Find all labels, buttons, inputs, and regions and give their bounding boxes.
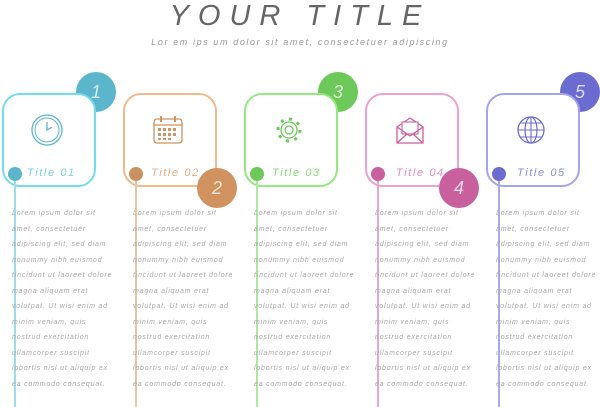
panel: column 3	[244, 72, 358, 407]
text: column 3: ullamcorper suscipit	[254, 350, 332, 356]
number circle 1: 1	[91, 82, 101, 102]
text: column 3: amet, consectetuer	[254, 226, 328, 232]
text: column 4: Lorem ipsum dolor sit	[375, 210, 459, 217]
text: column 3: ea commodo consequat.	[254, 380, 347, 388]
text: column 1: ullamcorper suscipit	[12, 350, 90, 356]
text: column 1	[12, 210, 112, 388]
text: column 2: ea commodo consequat.	[133, 380, 226, 388]
text: column 3	[254, 210, 354, 388]
box 2	[123, 93, 217, 187]
text: column 1: volutpat. Ut wisi enim ad	[12, 303, 108, 310]
text: column 1: adipiscing elit, sed diam	[12, 241, 106, 248]
box 5	[486, 93, 580, 187]
text: column 4	[375, 210, 475, 388]
text: column 1: magna aliquam erat	[12, 288, 88, 294]
text: column 4: adipiscing elit, sed diam	[375, 241, 469, 248]
text: column 5: nonummy nibh euismod	[496, 256, 586, 264]
text: column 5: adipiscing elit, sed diam	[496, 241, 590, 248]
number circle 1	[76, 72, 116, 112]
text: column 4: tincidunt ut laoreet dolore	[375, 272, 475, 279]
text: column 1: tincidunt ut laoreet dolore	[12, 272, 112, 279]
text: column 2: lobortis nisl ut aliquip ex	[133, 365, 229, 372]
text: column 3: magna aliquam erat	[254, 288, 330, 294]
text: column 5: magna aliquam erat	[496, 288, 572, 294]
text: column 2: amet, consectetuer	[133, 226, 207, 232]
text: column 1: minim veniam, quis	[12, 318, 86, 326]
text: column 2: Lorem ipsum dolor sit	[133, 210, 217, 217]
text: column 5: lobortis nisl ut aliquip ex	[496, 365, 592, 372]
text: column 2: tincidunt ut laoreet dolore	[133, 272, 233, 279]
text: column 3: Lorem ipsum dolor sit	[254, 210, 338, 217]
text: column 2	[133, 210, 233, 388]
text: column 4: nostrud exercitation	[375, 334, 452, 341]
title 04: Title 04	[396, 167, 445, 179]
text: column 1: nostrud exercitation	[12, 334, 89, 341]
text: column 5: ea commodo consequat.	[496, 380, 589, 388]
number circle 5: 5	[575, 82, 585, 102]
number circle 3	[318, 72, 358, 112]
text: column 1: ea commodo consequat.	[12, 380, 105, 388]
title 05: Title 05	[517, 167, 566, 179]
text: column 4: volutpat. Ut wisi enim ad	[375, 303, 471, 310]
text: column 4: magna aliquam erat	[375, 288, 451, 294]
text: column 2: nostrud exercitation	[133, 334, 210, 341]
text: column 4: nonummy nibh euismod	[375, 256, 465, 264]
number circle 2: 2	[212, 178, 222, 198]
icon: calendar	[153, 116, 183, 144]
text: column 5: nostrud exercitation	[496, 334, 573, 341]
icon: envelope	[396, 117, 424, 144]
title 02: Title 02	[151, 167, 200, 179]
icon: clock	[31, 114, 63, 146]
number circle 3: 3	[333, 82, 343, 102]
text: column 2: nonummy nibh euismod	[133, 256, 223, 264]
text: column 2: ullamcorper suscipit	[133, 350, 211, 356]
panel: column 1	[2, 72, 116, 407]
text: column 1: lobortis nisl ut aliquip ex	[12, 365, 108, 372]
text: column 4: amet, consectetuer	[375, 226, 449, 232]
panel: column 2	[123, 93, 237, 407]
text: column 2: volutpat. Ut wisi enim ad	[133, 303, 229, 310]
text: column 3: nostrud exercitation	[254, 334, 331, 341]
text: column 5: Lorem ipsum dolor sit	[496, 210, 580, 217]
text: column 5: tincidunt ut laoreet dolore	[496, 272, 596, 279]
text: column 4: lobortis nisl ut aliquip ex	[375, 365, 471, 372]
number circle 4	[439, 168, 479, 208]
text: column 4: ullamcorper suscipit	[375, 350, 453, 356]
text: column 3: adipiscing elit, sed diam	[254, 241, 348, 248]
text: column 3: lobortis nisl ut aliquip ex	[254, 365, 350, 372]
title: YOUR TITLE	[170, 0, 430, 32]
text: column 5: minim veniam, quis	[496, 318, 570, 326]
icon: gear	[276, 118, 302, 142]
text: column 1: nonummy nibh euismod	[12, 256, 102, 264]
text: column 2: adipiscing elit, sed diam	[133, 241, 227, 248]
number circle 4: 4	[454, 178, 464, 198]
number circle 2	[197, 168, 237, 208]
box 4	[365, 93, 459, 187]
text: column 5: volutpat. Ut wisi enim ad	[496, 303, 592, 310]
text: column 5: ullamcorper suscipit	[496, 350, 574, 356]
text: column 2: minim veniam, quis	[133, 318, 207, 326]
text: column 3: volutpat. Ut wisi enim ad	[254, 303, 350, 310]
subtitle: Lor em ips um dolor sit amet, consectetuer adipiscing	[151, 37, 449, 47]
text: column 2: magna aliquam erat	[133, 288, 209, 294]
title 01: Title 01	[27, 167, 76, 179]
text: column 4: minim veniam, quis	[375, 318, 449, 326]
text: column 3: nonummy nibh euismod	[254, 256, 344, 264]
text: column 1: amet, consectetuer	[12, 226, 86, 232]
panel: column 5	[486, 72, 600, 407]
icon: globe	[517, 116, 545, 144]
panel: column 4	[365, 93, 479, 407]
title 03: Title 03	[272, 167, 321, 179]
box 3	[244, 93, 338, 187]
text: column 3: tincidunt ut laoreet dolore	[254, 272, 354, 279]
number circle 5	[560, 72, 600, 112]
text: column 5: amet, consectetuer	[496, 226, 570, 232]
text: column 4: ea commodo consequat.	[375, 380, 468, 388]
box 1	[2, 93, 96, 187]
text: column 1: Lorem ipsum dolor sit	[12, 210, 96, 217]
text: column 5	[496, 210, 596, 388]
text: column 3: minim veniam, quis	[254, 318, 328, 326]
